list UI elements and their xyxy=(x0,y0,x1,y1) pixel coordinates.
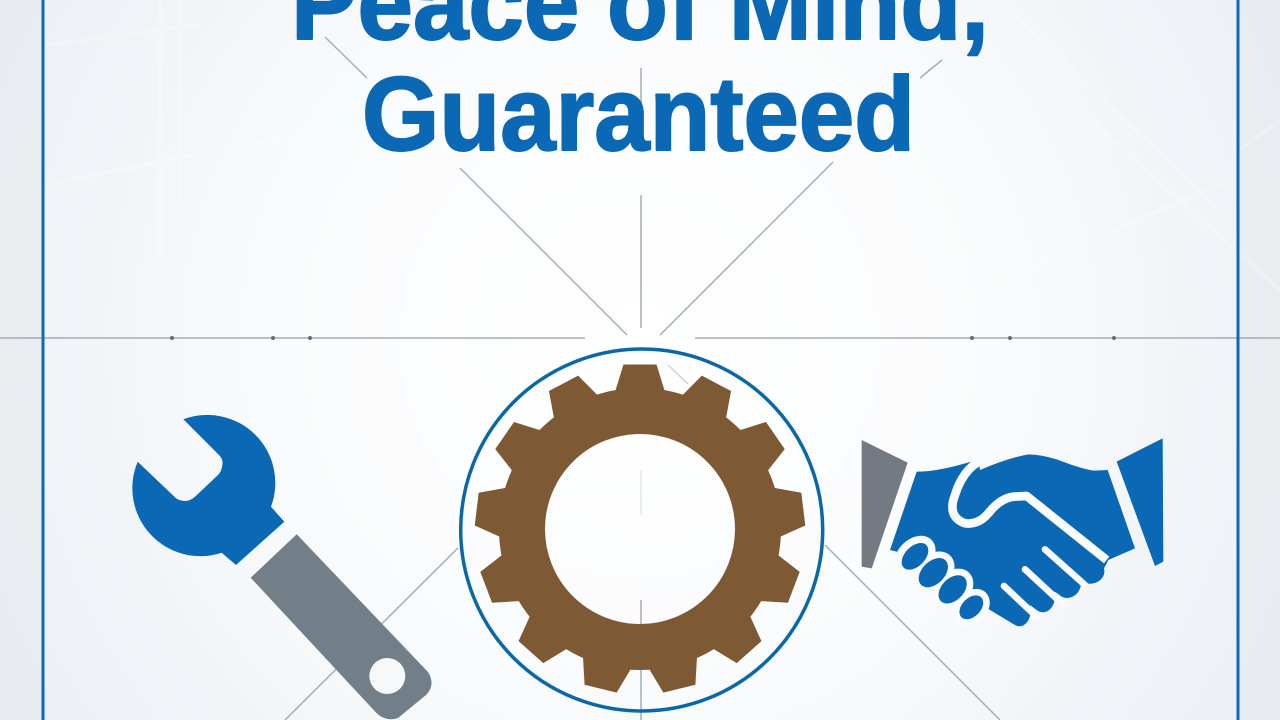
icon: gear in circle xyxy=(461,349,823,711)
icon: wrench xyxy=(132,415,432,719)
right cuff xyxy=(1117,438,1163,566)
wrench handle xyxy=(251,534,432,719)
finger gaps xyxy=(1004,549,1085,617)
title xyxy=(291,0,989,173)
left cuff xyxy=(862,440,908,568)
clasped hands xyxy=(890,454,1135,626)
thumb band xyxy=(952,457,1107,560)
title: Guaranteed xyxy=(362,56,915,173)
wrench head xyxy=(132,415,284,565)
knuckles xyxy=(897,538,988,624)
knuckles outline xyxy=(886,528,997,633)
icon: handshake xyxy=(862,438,1163,633)
